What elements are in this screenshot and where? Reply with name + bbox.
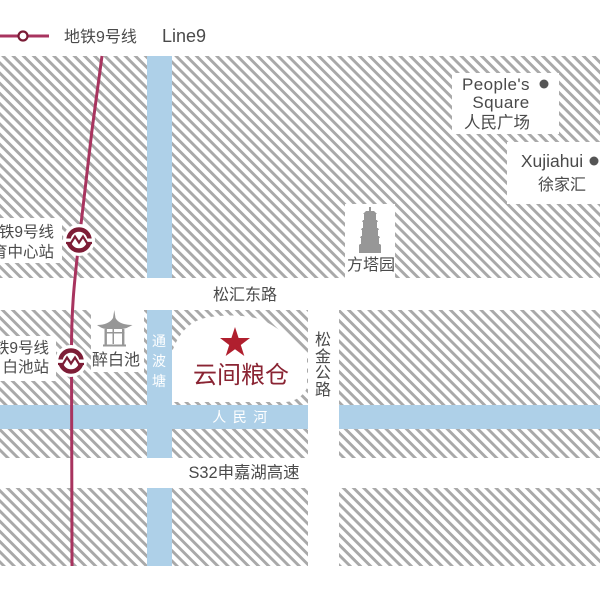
label: People's Square: Square [472,93,530,112]
dot: People's Square [540,80,548,88]
label: Zuibaichi station: 白池站 [2,358,49,376]
river: Tongbotang [147,56,172,566]
highlight: Yunjian Granary [172,316,307,402]
label: Xujiahui: Xujiahui [521,151,583,171]
label: Zuibaichi station [0,336,56,381]
label: Songjin Road: 松 [315,331,331,349]
label: Tongbotang river: 通 [152,333,166,349]
label: People's Square [452,73,559,134]
icon: pavilion [97,310,132,346]
label: Tongbotang river [152,333,166,389]
label: sports centre station [0,218,62,263]
metro line 9 route [72,56,102,566]
label: People's Square: 人民广场 [464,113,530,132]
label: Songjin Road [315,331,331,399]
label: Xujiahui: 徐家汇 [538,176,586,194]
river: Renmin River [0,405,600,429]
landmark: Zuibaichi pavilion [91,310,144,372]
landmark: Zuibaichi pavilion: 醉白池 [92,351,140,369]
legend: metro line 9 [0,26,206,46]
legend: metro line 9: Line9 [162,26,206,46]
icon: metro logo upper [63,224,95,256]
label: Songjin Road: 公 [315,365,331,382]
label: Renmin River: 人民河 [212,409,274,425]
label: Songjin Road: 金 [315,348,331,366]
label: People's Square: People's [462,75,530,94]
icon: metro logo lower [55,345,87,377]
label: Songhui East Road: 松汇东路 [213,286,277,304]
landmark: Fangta Garden: 方塔园 [347,256,395,274]
label: Songjin Road: 路 [315,381,331,399]
landmark: Fangta Garden [345,204,395,278]
highlight: Yunjian Granary: 云间粮仓 [193,362,289,389]
dot: Xujiahui [590,156,598,166]
legend: metro line 9: 地铁9号线 [64,28,137,46]
label: Tongbotang river: 塘 [152,373,166,389]
icon: red star [220,327,250,356]
icon: pagoda [359,207,381,253]
label: Tongbotang river: 波 [152,353,166,369]
label: Xujiahui [507,142,600,204]
label: S32 expressway: S32申嘉湖高速 [188,464,300,482]
